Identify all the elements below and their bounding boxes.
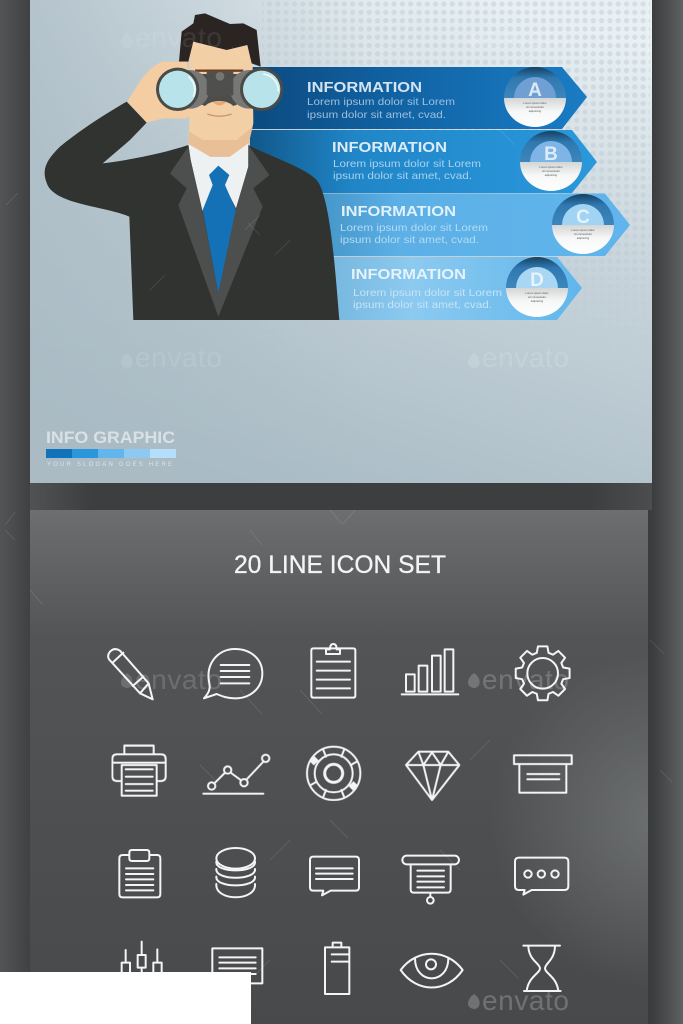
envato watermarks: envato <box>482 664 569 695</box>
tie <box>203 166 236 293</box>
letter A: A <box>528 80 542 101</box>
icon: speech bubble <box>204 649 262 698</box>
icon rows 1 and 2 <box>108 644 572 800</box>
panel shadow band <box>30 483 652 510</box>
jacket <box>45 102 339 320</box>
icon: notepad <box>119 850 160 897</box>
lapels <box>170 145 269 317</box>
icon: line chart <box>203 755 269 794</box>
panel title: 20 LINE ICON SET <box>234 551 446 579</box>
ribbon C <box>300 194 630 256</box>
badge A <box>504 67 566 127</box>
letter C: C <box>576 207 590 228</box>
shirt collar <box>188 143 248 212</box>
badge A caption: adipiscing <box>529 109 542 113</box>
badge A caption <box>523 101 547 113</box>
badge D caption: adipiscing <box>531 299 544 303</box>
envato watermarks: envato <box>482 985 569 1016</box>
badge C caption <box>571 228 595 240</box>
ribbon B heading: INFORMATION <box>332 139 447 156</box>
slogan: YOUR SLOGAN GOES HERE <box>47 462 172 468</box>
badge D caption <box>525 291 549 303</box>
ribbon A <box>250 67 587 129</box>
icon: text card <box>212 948 262 983</box>
ribbon D body: Lorem ipsum dolor sit Lorem <box>353 287 502 299</box>
envato watermarks: envato <box>482 22 569 53</box>
icon: printer <box>112 746 166 796</box>
envato watermarks: envato <box>482 342 569 373</box>
icon: diamond <box>406 752 459 800</box>
ribbon B <box>250 130 597 193</box>
ribbon B: ipsum dolor sit amet, cvad. <box>333 170 472 182</box>
badge B caption: adipiscing <box>545 173 558 177</box>
icon rows 3 and 4 <box>119 848 568 994</box>
badge B caption <box>539 165 563 177</box>
ribbon A: ipsum dolor sit amet, cvad. <box>307 109 446 121</box>
dotted world map <box>262 2 650 238</box>
hair <box>179 13 261 67</box>
icon: bar chart <box>402 649 458 694</box>
ribbon C heading: INFORMATION <box>341 203 456 220</box>
ribbon C: ipsum dolor sit amet, cvad. <box>340 234 479 246</box>
panel: binoculars infographic <box>30 0 652 483</box>
icon: candlestick chart <box>122 942 162 980</box>
brand block: info graphic <box>46 429 176 468</box>
badge C caption: Lorem ipsum dolor <box>571 228 595 232</box>
ribbon D heading: INFORMATION <box>351 266 466 283</box>
icon: eye <box>401 954 463 987</box>
brand title: INFO GRAPHIC <box>46 429 175 447</box>
icon: message dots <box>515 858 568 895</box>
letter D: D <box>530 270 544 291</box>
badge A caption: Lorem ipsum dolor <box>523 101 547 105</box>
badge B caption: Lorem ipsum dolor <box>539 165 563 169</box>
envato watermarks: envato <box>135 664 222 695</box>
badge A caption: sit consectetur <box>526 105 544 109</box>
badge C caption: adipiscing <box>577 236 590 240</box>
icon: message lines <box>310 857 359 895</box>
badge D <box>506 257 568 317</box>
ribbon A heading: INFORMATION <box>307 79 422 96</box>
ribbon B body: Lorem ipsum dolor sit Lorem <box>333 158 481 170</box>
hand <box>127 62 193 123</box>
badge C caption: sit consectetur <box>574 232 592 236</box>
white corner block <box>0 972 251 1024</box>
ribbon D: ipsum dolor sit amet, cvad. <box>353 299 492 311</box>
icon: pencil <box>108 649 153 699</box>
panel: line icon set <box>30 510 648 1024</box>
badge B caption: sit consectetur <box>542 169 560 173</box>
businessman with binoculars <box>45 13 339 320</box>
icon: poker chip target <box>307 747 360 800</box>
icon: gear <box>516 646 570 700</box>
binoculars <box>156 68 283 111</box>
badge D caption: Lorem ipsum dolor <box>525 291 549 295</box>
icon: battery <box>325 943 349 994</box>
neck and face <box>188 42 253 157</box>
colour bar <box>46 449 176 458</box>
icon: hourglass <box>523 946 561 991</box>
badge D caption: sit consectetur <box>528 295 546 299</box>
badge C <box>552 194 614 254</box>
icon: archive box <box>514 755 572 793</box>
letter B: B <box>544 144 558 165</box>
envato watermarks <box>121 22 569 1016</box>
icon: database stack <box>216 848 255 897</box>
ribbon D <box>300 257 582 320</box>
mouth <box>207 114 232 116</box>
icon: projector screen <box>402 856 459 904</box>
envato watermarks: envato <box>135 342 222 373</box>
badge B <box>520 131 582 191</box>
icon: clipboard <box>311 644 355 698</box>
envato watermarks: envato <box>135 22 222 53</box>
ribbon A body: Lorem ipsum dolor sit Lorem <box>307 96 455 108</box>
ribbon C body: Lorem ipsum dolor sit Lorem <box>340 222 488 234</box>
